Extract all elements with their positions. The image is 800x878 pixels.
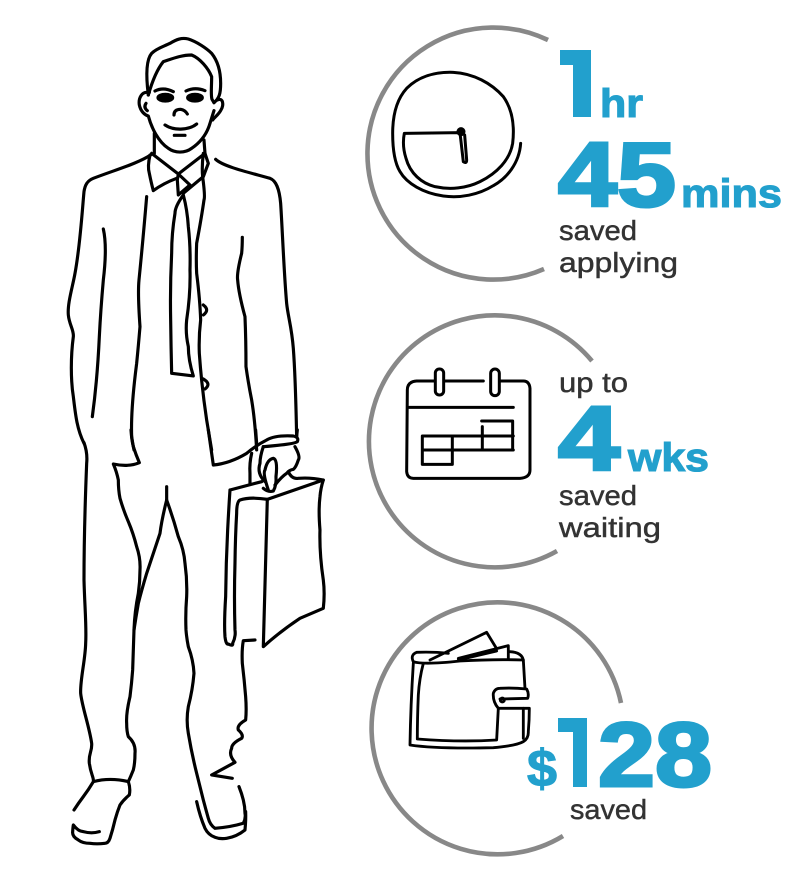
upper body and head bbox=[68, 38, 297, 450]
lower body, hand and bag bbox=[73, 430, 324, 844]
caption: saved applying: applying bbox=[559, 247, 678, 278]
stat: 4 wks: wks bbox=[627, 436, 709, 480]
panel: time saved waiting bbox=[369, 315, 709, 567]
icon: wallet bbox=[410, 632, 529, 748]
ring arc bbox=[372, 602, 621, 854]
caption: saved waiting bbox=[558, 480, 661, 543]
ring arc bbox=[369, 315, 592, 567]
caption: saved: saved bbox=[570, 794, 647, 825]
stat: 4 wks: 4 bbox=[558, 389, 620, 490]
icon: clock bbox=[393, 72, 521, 197]
stat: 45 mins bbox=[558, 125, 782, 226]
caption: saved waiting: saved bbox=[559, 480, 637, 511]
stat: 1 hr: 1 bbox=[552, 35, 596, 136]
stat: 1 hr: hr bbox=[600, 82, 643, 126]
stat: $128: 28 bbox=[598, 705, 712, 806]
panel: time saved applying bbox=[367, 28, 782, 280]
caption: saved applying bbox=[559, 215, 678, 278]
stat: $128 bbox=[527, 718, 710, 790]
icon: calendar bbox=[407, 369, 530, 478]
caption: saved applying: saved bbox=[559, 215, 637, 246]
illustration: man in suit with bag bbox=[68, 38, 324, 844]
stat: $128: 1 bbox=[552, 705, 594, 806]
caption: saved waiting: waiting bbox=[558, 512, 661, 543]
stat: $128: $ bbox=[527, 740, 557, 798]
stat: 45 mins: 45 bbox=[558, 125, 676, 226]
stat: 4 wks bbox=[558, 389, 709, 490]
stat: 45 mins: mins bbox=[681, 172, 782, 216]
caption: up to: up to bbox=[559, 367, 628, 398]
ring arc bbox=[367, 28, 548, 280]
stat: 1 hr bbox=[560, 50, 643, 118]
panel: money saved bbox=[372, 602, 712, 854]
